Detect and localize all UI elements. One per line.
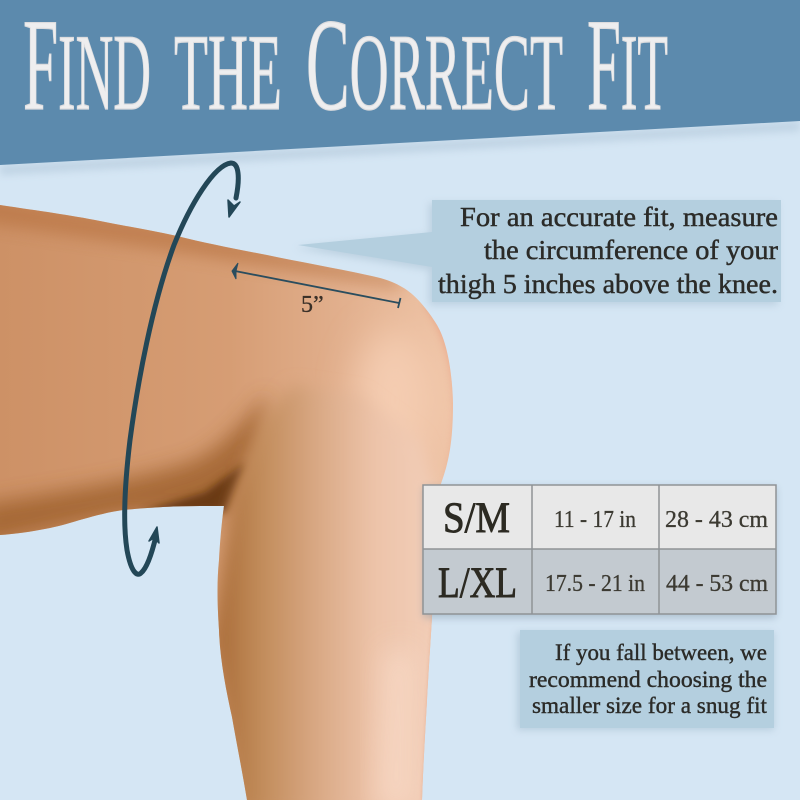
calf highlight bbox=[378, 650, 414, 800]
knee highlight bbox=[345, 328, 432, 436]
callout: measuring instruction: For an accurate fit, measure bbox=[460, 202, 778, 232]
title: THE bbox=[174, 12, 282, 133]
row: S/M: S/M bbox=[443, 495, 510, 542]
row: L/XL: 44 - 53 cm bbox=[666, 571, 768, 597]
arrowhead top bbox=[228, 200, 240, 217]
5 inch measure arrow bbox=[232, 263, 400, 318]
measure label: 5” bbox=[301, 292, 324, 318]
size table bbox=[423, 485, 776, 618]
callout: measuring instruction: thigh 5 inches above the knee. bbox=[438, 269, 778, 299]
circumference arrow bbox=[125, 163, 240, 574]
row: L/XL bbox=[423, 549, 776, 614]
knee edge blush bbox=[426, 310, 453, 446]
note: between sizes: recommend choosing the bbox=[529, 667, 767, 692]
calf base bbox=[212, 385, 445, 800]
underside shadow bbox=[0, 392, 268, 545]
row: S/M: 11 - 17 in bbox=[554, 507, 636, 533]
note: between sizes: If you fall between, we bbox=[555, 640, 767, 665]
callout: measuring instruction bbox=[295, 200, 781, 305]
arrowhead bottom bbox=[149, 527, 159, 543]
row: S/M: 28 - 43 cm bbox=[665, 507, 768, 533]
title bbox=[23, 0, 668, 138]
thigh top shading bbox=[0, 195, 400, 288]
leg photo bbox=[0, 195, 470, 800]
header banner bbox=[0, 0, 800, 175]
note: between sizes: smaller size for a snug fit bbox=[532, 693, 768, 718]
calf right edge blush bbox=[421, 622, 432, 800]
note: between sizes bbox=[517, 630, 774, 730]
callout: measuring instruction: the circumference of your bbox=[484, 235, 778, 265]
row: S/M bbox=[423, 485, 776, 549]
row: L/XL: 17.5 - 21 in bbox=[545, 571, 645, 597]
row: L/XL: L/XL bbox=[438, 560, 517, 607]
